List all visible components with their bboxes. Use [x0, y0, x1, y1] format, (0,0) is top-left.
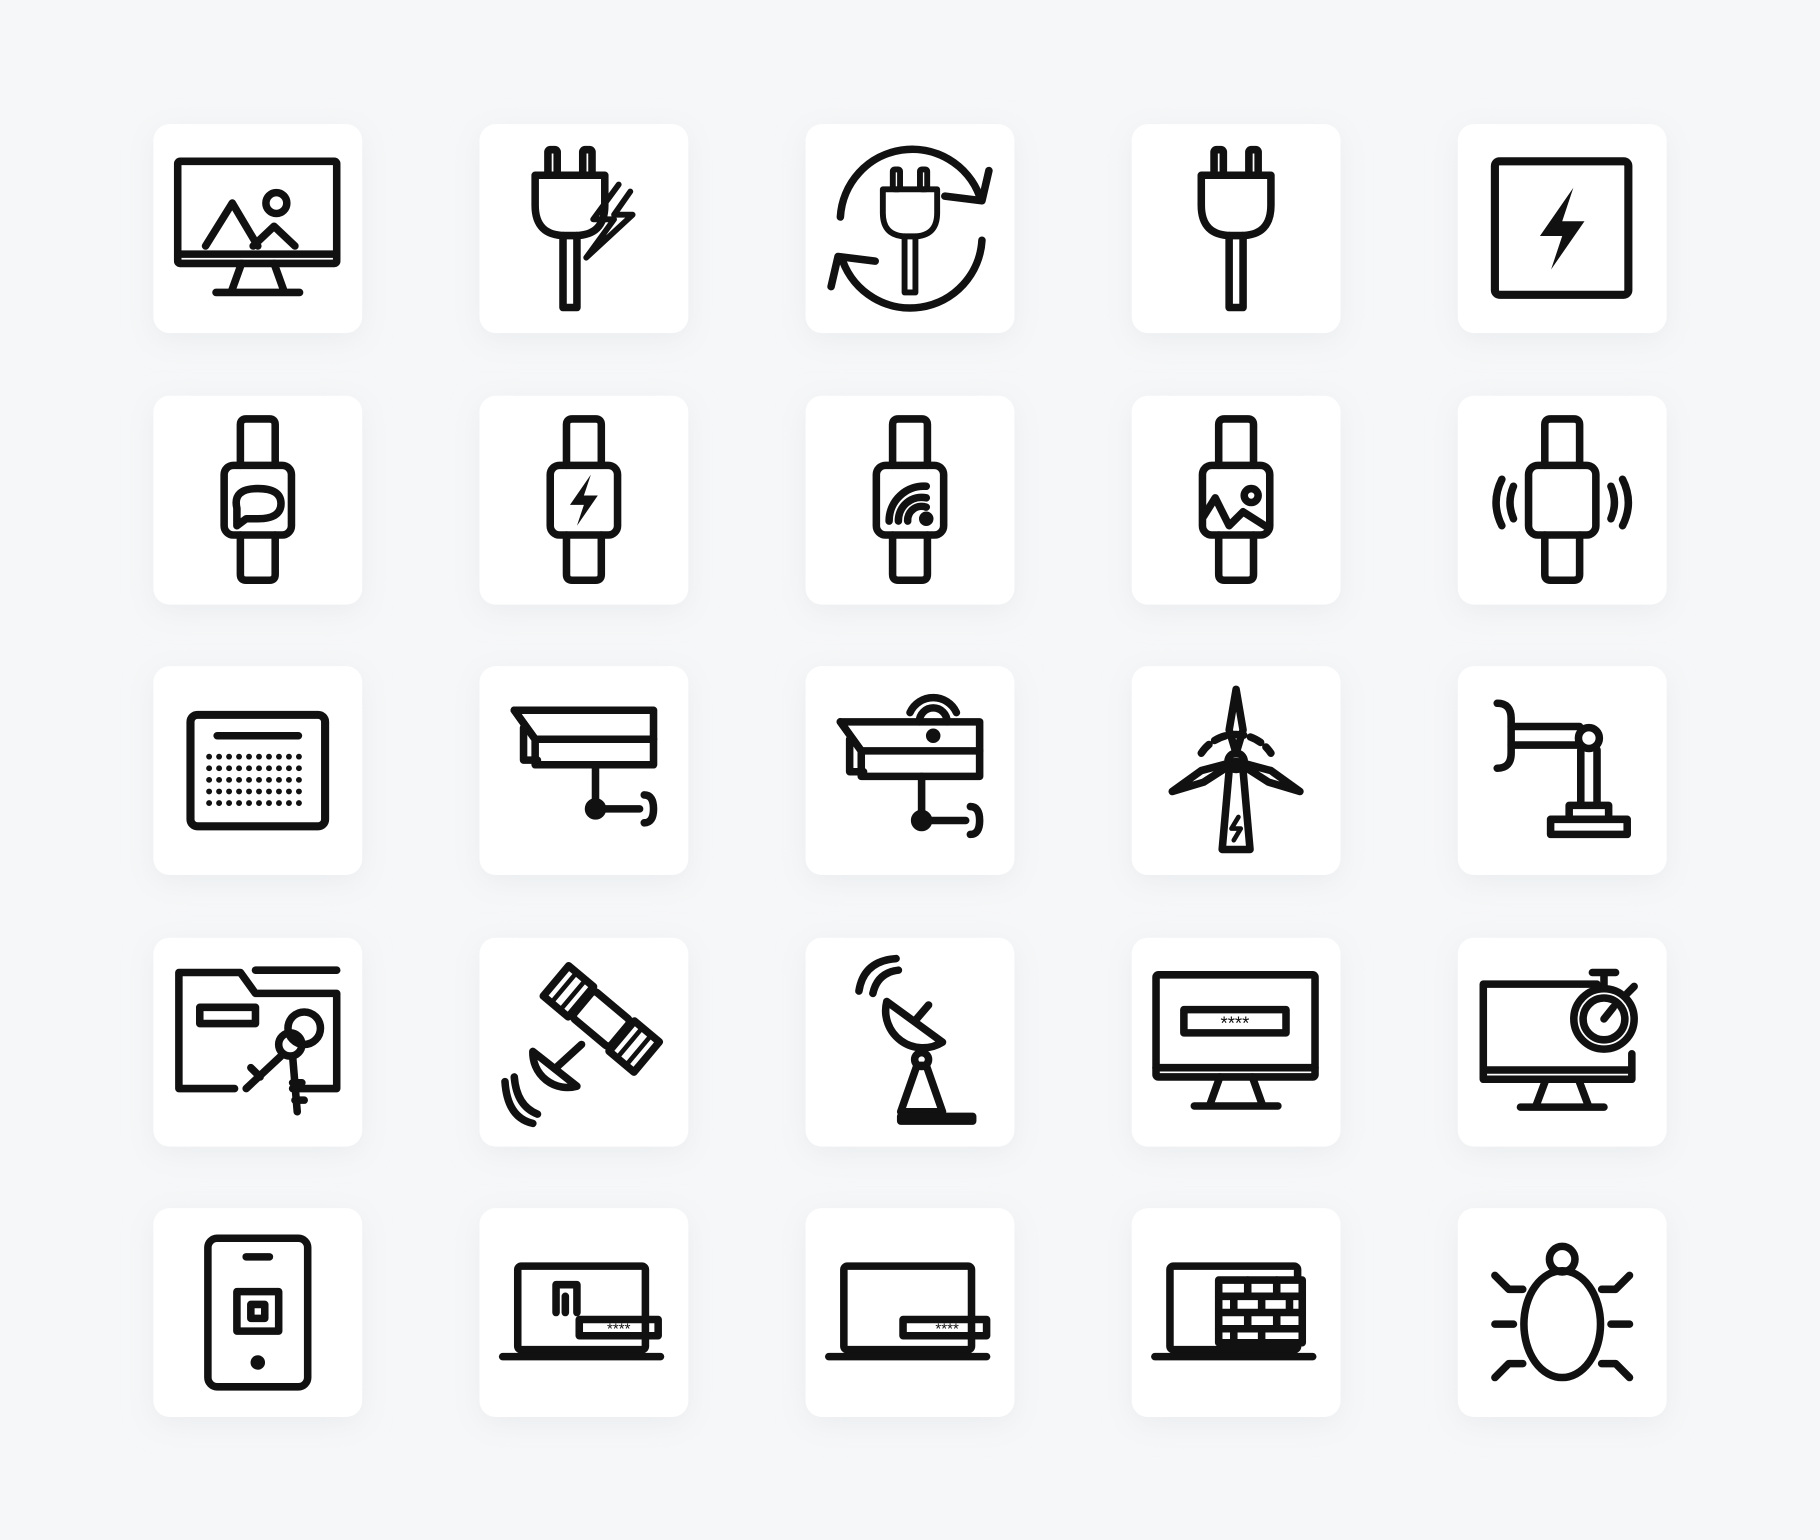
icon: laptop with password: ****: [935, 1320, 959, 1337]
icon: monitor with password: [1156, 975, 1315, 1106]
icon: laptop with window and password: ****: [607, 1320, 631, 1337]
icon: plug: [1201, 150, 1271, 308]
icon: watch with chat bubble: [224, 419, 291, 580]
icon: laptop with password: [829, 1266, 987, 1357]
icon: plug with lightning: [535, 150, 633, 308]
icon: keypad: [190, 715, 325, 826]
icon: satellite: [505, 966, 659, 1123]
icon: laptop with window and password: [503, 1266, 660, 1357]
icon: watch vibrating: [1496, 419, 1628, 580]
icon: security camera with wifi: [840, 698, 980, 834]
icon: plug with refresh arrows: [831, 149, 989, 308]
icon: satellite dish: [859, 959, 973, 1121]
icon: wind turbine: [1172, 689, 1300, 849]
icon: bug: [1495, 1246, 1630, 1378]
icon: watch with lightning: [550, 419, 618, 580]
icon: square with lightning: [1495, 161, 1628, 295]
icon: robot arm: [1497, 703, 1627, 834]
icon: security camera: [514, 710, 654, 823]
icon: laptop with firewall: [1155, 1266, 1313, 1357]
icon: watch with wifi: [876, 419, 944, 580]
icon: folder with keys: [179, 970, 337, 1112]
icon: monitor with stopwatch: [1483, 973, 1634, 1107]
icon: monitor with password: ****: [1221, 1012, 1249, 1033]
icon: watch with image: [1202, 419, 1270, 580]
icon: phone with QR: [208, 1238, 308, 1387]
icon: monitor with image: [178, 161, 337, 292]
